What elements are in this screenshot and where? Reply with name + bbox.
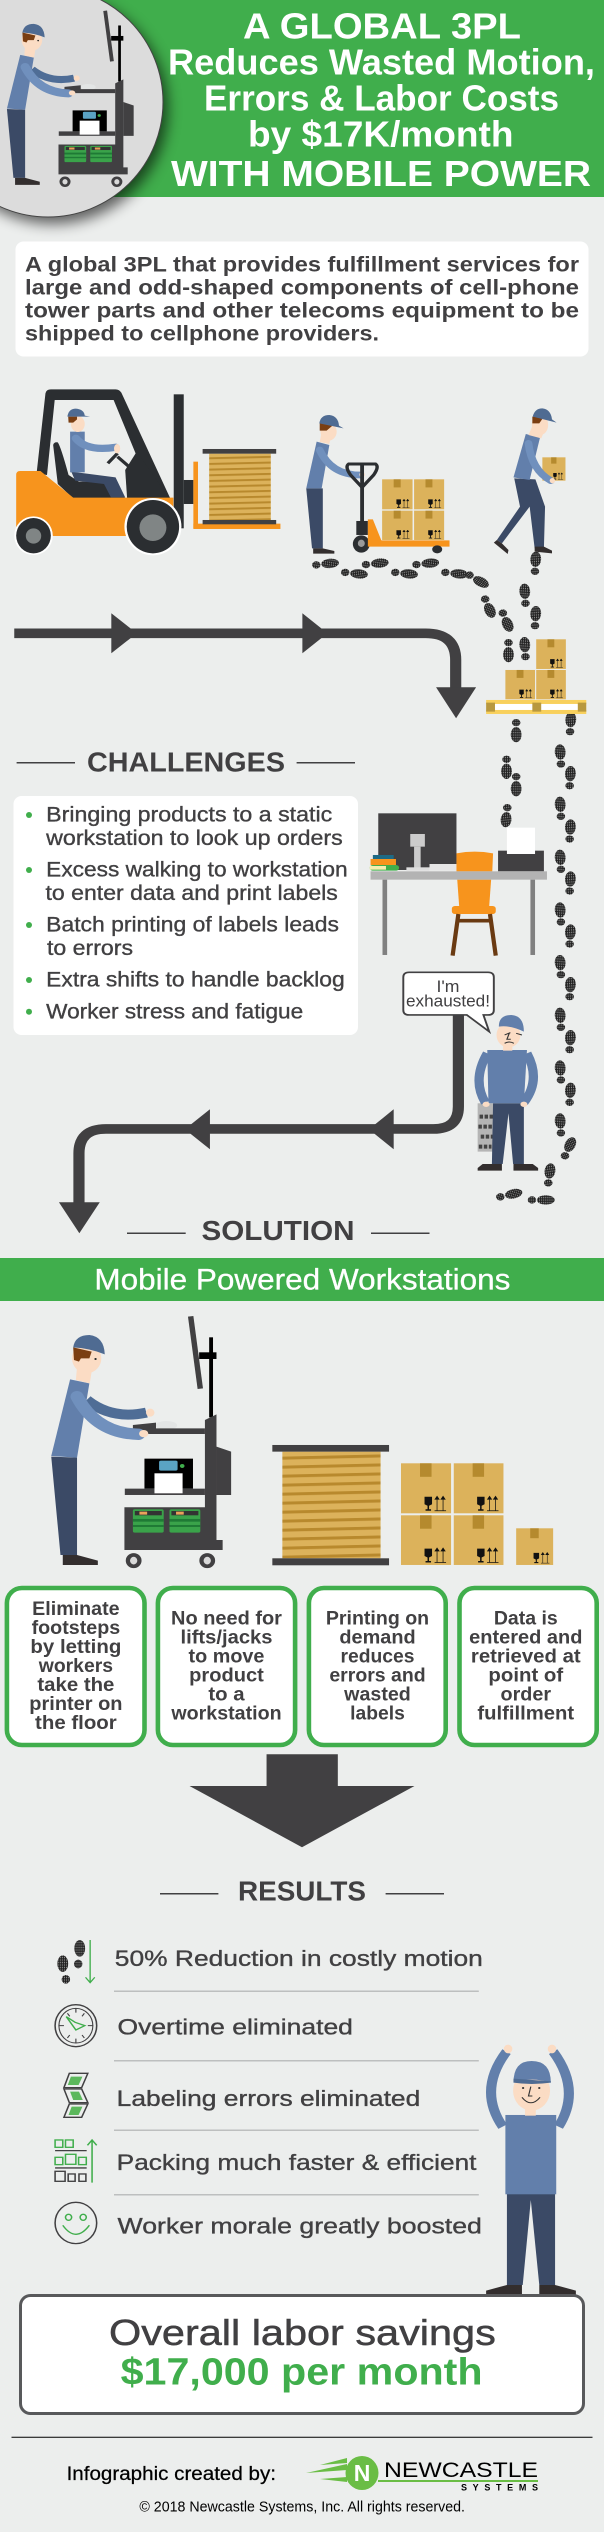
title: Errors & Labor Costs	[204, 78, 559, 118]
benefit card 3: demand	[339, 1626, 416, 1648]
pallet with boxes	[486, 639, 586, 714]
benefit card 4: point of	[488, 1664, 564, 1686]
logo: Newcastle Systems: NEWCASTLE	[384, 2459, 538, 2482]
process arrow down then left	[59, 1015, 458, 1233]
solution green band	[0, 1258, 604, 1301]
icon: footprints with down arrow	[57, 1940, 95, 1984]
benefit card 2	[158, 1588, 295, 1745]
results icons and celebrating worker	[55, 1940, 576, 2295]
title: by $17K/month	[248, 114, 514, 154]
stacked boxes	[401, 1463, 553, 1565]
celebrating worker	[486, 2045, 576, 2295]
icon: packing boxes with up arrow	[55, 2140, 97, 2183]
speech bubble shape	[403, 972, 494, 1032]
benefit card 4	[460, 1588, 597, 1745]
header green band	[100, 0, 604, 197]
result: morale: Worker morale greatly boosted	[118, 2214, 482, 2239]
benefit card 1: Eliminate	[32, 1598, 120, 1620]
footer rule	[12, 2436, 592, 2438]
worker with pallet jack	[306, 415, 450, 554]
intro text panel	[16, 242, 588, 356]
title: A GLOBAL 3PL	[243, 6, 521, 46]
benefit card 4: retrieved at	[471, 1645, 581, 1667]
benefit card 3: errors and	[329, 1664, 426, 1686]
logo: Newcastle Systems: SYSTEMS	[461, 2482, 538, 2492]
benefit card 4: entered and	[469, 1626, 582, 1648]
benefit card 1: footsteps	[32, 1617, 120, 1639]
benefit card 2: lifts/jacks	[180, 1626, 273, 1648]
challenges list panel	[14, 796, 358, 1035]
forklift	[14, 389, 280, 555]
benefit card 3	[309, 1588, 446, 1745]
infographic credit: Infographic created by:	[67, 2464, 276, 2485]
result: motion: 50% Reduction in costly motion	[115, 1946, 483, 1971]
solution green band: Mobile Powered Workstations	[94, 1263, 510, 1296]
benefit card 3: wasted	[343, 1683, 411, 1705]
intro text panel: tower parts and other telecoms equipment to be	[25, 300, 579, 322]
benefit card 1: by letting	[30, 1636, 121, 1658]
big down arrow	[190, 1754, 414, 1847]
challenges list panel: Batch printing of labels leads	[46, 914, 339, 937]
benefit card 2: No need for	[171, 1607, 282, 1629]
intro text panel: large and odd-shaped components of cell-phone	[25, 276, 579, 300]
benefit card 4: Data is	[494, 1607, 558, 1629]
intro text panel: A global 3PL that provides fulfillment services for	[25, 254, 579, 276]
benefit card 1: the floor	[35, 1712, 117, 1734]
speech bubble text: I'm	[436, 977, 460, 996]
copyright: © 2018 Newcastle Systems, Inc. All rights reserved.	[139, 2500, 465, 2516]
benefit card 2: to a	[208, 1683, 245, 1705]
desk workstation	[370, 813, 547, 956]
process arrow right then down	[14, 613, 476, 718]
title: WITH MOBILE POWER	[171, 153, 591, 194]
title: Reduces Wasted Motion,	[168, 42, 595, 82]
benefit card 1: workers	[38, 1655, 113, 1677]
header circle	[0, 0, 163, 217]
icon: labels	[64, 2073, 88, 2117]
overall savings panel	[20, 2296, 584, 2414]
worker at mobile powered workstation	[51, 1316, 231, 1566]
solution illustration	[51, 1316, 553, 1566]
result: packing: Packing much faster & efficient	[117, 2150, 477, 2175]
benefit card 3: Printing on	[326, 1607, 429, 1629]
header	[0, 0, 604, 224]
challenges list panel: Worker stress and fatigue	[46, 1000, 303, 1023]
footprints trail upper	[311, 551, 577, 742]
challenges list panel: to enter data and print labels	[46, 882, 338, 905]
benefit card 3: reduces	[340, 1645, 415, 1667]
warehouse scene	[14, 389, 586, 742]
benefit card 1	[7, 1588, 145, 1745]
challenges list panel: to errors	[47, 937, 133, 960]
cable spool on forks	[203, 449, 276, 524]
benefit card 1: take the	[37, 1674, 115, 1696]
benefit card 4: order	[501, 1683, 551, 1705]
result: labeling: Labeling errors eliminated	[117, 2086, 420, 2111]
challenges list panel: Extra shifts to handle backlog	[46, 969, 345, 992]
results dividers	[114, 1991, 479, 2195]
logo: Newcastle Systems	[306, 2456, 538, 2492]
challenges list panel: Bringing products to a static	[46, 804, 332, 827]
solution heading: SOLUTION	[202, 1215, 354, 1246]
speech bubble text	[406, 977, 490, 1010]
benefit card 2: product	[189, 1664, 264, 1686]
intro text panel: shipped to cellphone providers.	[25, 322, 379, 346]
title	[168, 6, 595, 194]
icon: smiley	[55, 2202, 97, 2244]
icon: clock	[55, 2005, 97, 2047]
benefit card 1: printer on	[29, 1693, 122, 1715]
benefit card 2: workstation	[170, 1702, 282, 1724]
worker carrying box	[494, 408, 565, 554]
header worker with mobile cart	[7, 11, 134, 186]
benefit card 3: labels	[350, 1702, 405, 1724]
large cable spool	[272, 1445, 389, 1565]
benefit card 4: fulfillment	[477, 1702, 575, 1724]
exhausted worker	[478, 1015, 538, 1171]
benefit card 2: to move	[189, 1645, 265, 1667]
challenges heading: CHALLENGES	[87, 746, 285, 778]
challenges list panel: workstation to look up orders	[45, 827, 343, 850]
result: overtime: Overtime eliminated	[118, 2015, 353, 2040]
overall savings panel: Overall labor savings	[109, 2312, 496, 2353]
logo: Newcastle Systems: N	[354, 2460, 370, 2486]
challenges list panel: Excess walking to workstation	[46, 859, 348, 882]
speech bubble text: exhausted!	[406, 992, 490, 1010]
overall savings panel: $17,000 per month	[121, 2351, 483, 2393]
header circle shadow	[0, 0, 168, 224]
results heading: RESULTS	[238, 1876, 366, 1907]
middle scene	[59, 744, 579, 1233]
footprints trail lower	[495, 744, 579, 1205]
